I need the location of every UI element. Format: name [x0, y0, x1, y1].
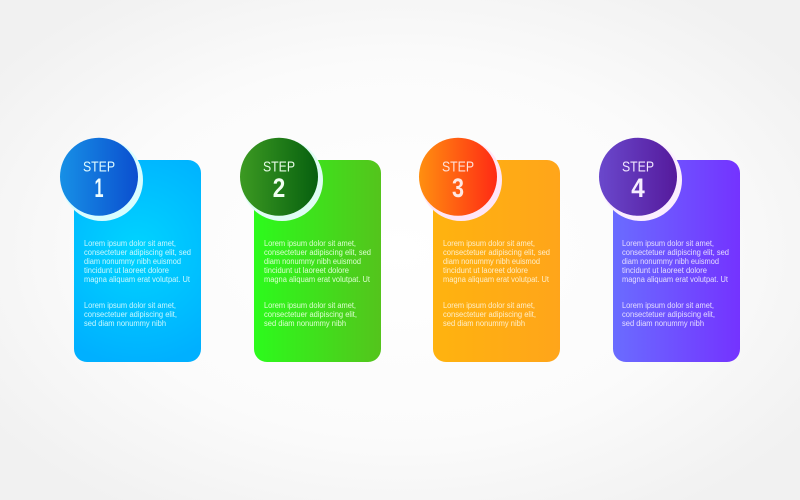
text block: step 1 description: diam nonummy nibh euismod	[84, 257, 181, 266]
text block: step 2 description: sed diam nonummy nibh	[264, 319, 346, 328]
icon: step 3 circle badge: 3	[452, 173, 464, 203]
text block: step 3 description: sed diam nonummy nibh	[443, 319, 525, 328]
icon: step 1 circle badge: 1	[94, 173, 104, 203]
text block: step 3 description	[443, 239, 550, 328]
text block: step 1 description: tincidunt ut laoreet dolore	[84, 266, 170, 275]
text block: step 3 description: Lorem ipsum dolor sit amet,	[443, 239, 535, 248]
text block: step 2 description: tincidunt ut laoreet dolore	[264, 266, 350, 275]
text block: step 2 description: Lorem ipsum dolor sit amet,	[264, 301, 356, 310]
text block: step 4 description: sed diam nonummy nibh	[622, 319, 704, 328]
icon: step 1 circle badge: STEP	[83, 160, 115, 176]
icon: step 1 circle badge	[60, 138, 143, 221]
text block: step 2 description: magna aliquam erat volutpat. Ut	[264, 275, 371, 284]
text block: step 3 description: tincidunt ut laoreet dolore	[443, 266, 529, 275]
text block: step 1 description: consectetuer adipiscing elit, sed	[84, 248, 191, 257]
icon: step 2 circle badge	[240, 138, 323, 221]
text block: step 1 description: consectetuer adipiscing elit,	[84, 310, 177, 319]
text block: step 3 description: consectetuer adipiscing elit, sed	[443, 248, 550, 257]
text block: step 3 description: Lorem ipsum dolor sit amet,	[443, 301, 535, 310]
panel: step 4	[599, 138, 740, 362]
text block: step 3 description: magna aliquam erat volutpat. Ut	[443, 275, 550, 284]
text block: step 2 description: Lorem ipsum dolor sit amet,	[264, 239, 356, 248]
text block: step 1 description: Lorem ipsum dolor sit amet,	[84, 239, 176, 248]
text block: step 1 description	[84, 239, 191, 328]
icon: step 2 circle badge: STEP	[263, 160, 295, 176]
text block: step 2 description: consectetuer adipiscing elit,	[264, 310, 357, 319]
text block: step 4 description: consectetuer adipiscing elit,	[622, 310, 715, 319]
icon: step 3 circle badge: STEP	[442, 160, 474, 176]
text block: step 1 description: sed diam nonummy nibh	[84, 319, 166, 328]
text block: step 2 description: consectetuer adipiscing elit, sed	[264, 248, 371, 257]
text block: step 4 description: diam nonummy nibh euismod	[622, 257, 719, 266]
text block: step 2 description	[264, 239, 371, 328]
text block: step 1 description: Lorem ipsum dolor sit amet,	[84, 301, 176, 310]
text block: step 1 description: magna aliquam erat volutpat. Ut	[84, 275, 191, 284]
icon: step 3 circle badge	[419, 138, 502, 221]
text block: step 4 description: magna aliquam erat volutpat. Ut	[622, 275, 729, 284]
text block: step 3 description: diam nonummy nibh euismod	[443, 257, 540, 266]
text block: step 4 description: tincidunt ut laoreet dolore	[622, 266, 708, 275]
text block: step 4 description: Lorem ipsum dolor sit amet,	[622, 301, 714, 310]
icon: step 4 circle badge: STEP	[622, 160, 654, 176]
panel: step 3	[419, 138, 560, 362]
text block: step 4 description: consectetuer adipiscing elit, sed	[622, 248, 729, 257]
text block: step 3 description: consectetuer adipiscing elit,	[443, 310, 536, 319]
text block: step 4 description: Lorem ipsum dolor sit amet,	[622, 239, 714, 248]
icon: step 2 circle badge: 2	[273, 173, 285, 203]
icon: step 4 circle badge	[599, 138, 682, 221]
panel: step 1	[60, 138, 201, 362]
icon: step 4 circle badge: 4	[631, 173, 645, 203]
text block: step 2 description: diam nonummy nibh euismod	[264, 257, 361, 266]
panel: step 2	[240, 138, 381, 362]
text block: step 4 description	[622, 239, 729, 328]
